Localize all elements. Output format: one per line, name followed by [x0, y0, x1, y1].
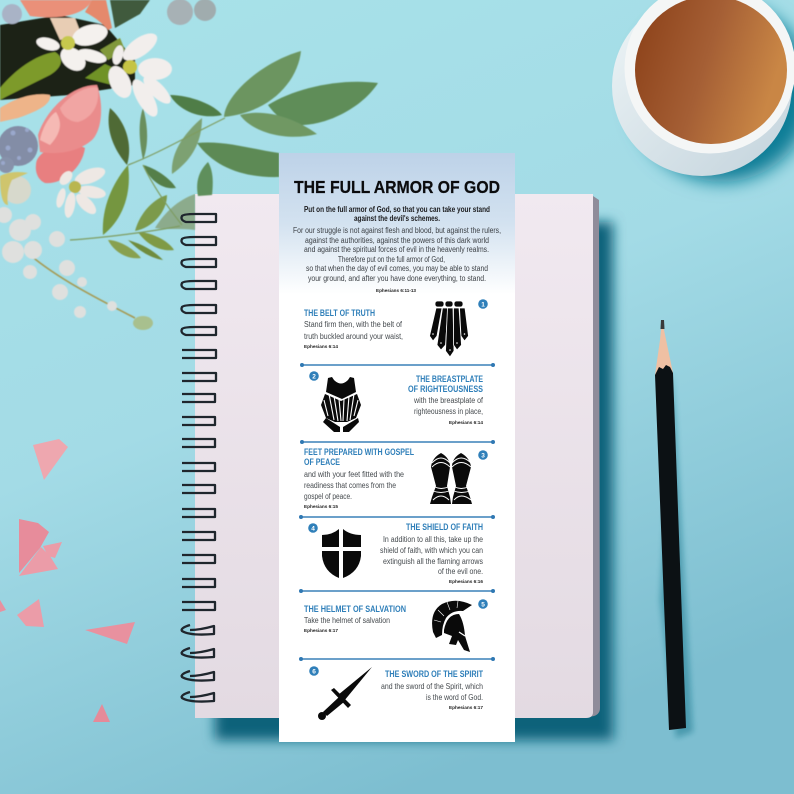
daisy 3 [55, 164, 107, 219]
tea cup [612, 0, 794, 182]
heading: belt: THE BELT OF TRUTH [304, 308, 375, 318]
intro verse body: against the authorities, against the powers of this dark world [305, 236, 489, 245]
text: shield [380, 535, 484, 576]
pink flower lower [36, 145, 85, 183]
badge 3: 3 [481, 452, 485, 459]
stems [30, 118, 225, 318]
icon: sword [318, 667, 372, 720]
bud [3, 176, 31, 204]
text: shield: In addition to all this, take up the [383, 535, 484, 544]
heading: sword: THE SWORD OF THE SPIRIT [385, 669, 483, 679]
section 6: sword [309, 666, 483, 720]
text: feet: readiness that comes from the [304, 481, 397, 490]
blue sprigs [0, 0, 216, 173]
reference: sword: Ephesians 6:17 [449, 705, 483, 711]
bookmark card [279, 153, 515, 742]
text: sword: and the sword of the Spirit, which [381, 682, 483, 691]
intro verse bold [304, 205, 490, 223]
salmon flower top [20, 0, 92, 17]
heading: feet: OF PEACE [304, 457, 340, 467]
text: belt: truth buckled around your waist, [304, 332, 403, 341]
section 5: helmet [304, 599, 488, 652]
reference: belt: Ephesians 6:14 [304, 344, 338, 350]
badge 2: 2 [312, 373, 316, 380]
badge 5: 5 [481, 601, 485, 608]
badge 1: 1 [481, 301, 485, 308]
icon: breastplate [321, 377, 361, 432]
reference: breastplate: Ephesians 6:14 [449, 420, 483, 426]
section 3: feet [304, 447, 488, 510]
leaves upper right [103, 51, 378, 260]
text: feet: and with your feet fitted with the [304, 470, 405, 479]
intro verse body [293, 226, 501, 283]
text: breastplate: with the breastplate of [413, 396, 484, 405]
notebook [195, 194, 613, 740]
heading: breastplate: THE BREASTPLATE [416, 374, 483, 384]
pink paper scraps [0, 439, 135, 722]
reference: helmet: Ephesians 6:17 [304, 628, 338, 634]
badge 6: 6 [312, 668, 316, 675]
text: sword: is the word of God. [426, 693, 483, 702]
intro verse bold: against the devil's schemes. [354, 214, 440, 223]
white daisy 1 [35, 21, 110, 76]
icon: greaves [430, 453, 472, 504]
text: belt [304, 320, 403, 341]
intro verse body: your ground, and after you have done everything, to stand. [308, 274, 486, 283]
title: THE FULL ARMOR OF GOD [294, 177, 500, 197]
badge 5 [478, 599, 488, 609]
text: helmet: Take the helmet of salvation [304, 616, 390, 625]
text: sword [381, 682, 483, 702]
intro verse body: For our struggle is not against flesh and blood, but against the rulers, [293, 226, 501, 235]
badge 3 [478, 450, 488, 460]
text: feet [304, 470, 405, 501]
heading: helmet: THE HELMET OF SALVATION [304, 604, 406, 614]
intro reference: Ephesians 6:11-13 [376, 288, 416, 294]
icon: shield [322, 529, 361, 578]
spiral binding [182, 214, 216, 702]
foliage backdrop [0, 15, 135, 100]
badge 4: 4 [311, 525, 315, 532]
text: belt: Stand firm then, with the belt of [304, 320, 403, 329]
section 1: belt of truth [304, 299, 488, 357]
icon: helmet [432, 601, 472, 652]
section 4: shield [308, 522, 484, 585]
pencil [655, 320, 693, 738]
reference: feet: Ephesians 6:15 [304, 504, 338, 510]
text: feet: gospel of peace. [304, 492, 352, 501]
heading: breastplate [408, 374, 483, 394]
badge 6 [309, 666, 319, 676]
heading: breastplate: OF RIGHTEOUSNESS [408, 384, 483, 394]
text: breastplate [413, 396, 484, 416]
text: shield: of the evil one. [438, 567, 483, 576]
flowers and leaves [0, 0, 378, 330]
card background [279, 153, 515, 742]
reference: shield: Ephesians 6:16 [449, 579, 483, 585]
badge 1 [478, 299, 488, 309]
white daisy 2 [104, 28, 175, 120]
intro verse bold: Put on the full armor of God, so that you can take your stand [304, 205, 490, 214]
icon: belt [430, 301, 468, 357]
small white flowers [0, 207, 117, 318]
badge 2 [309, 371, 319, 381]
badge 4 [308, 523, 318, 533]
dividers [299, 363, 495, 661]
text: shield: extinguish all the flaming arrows [383, 557, 483, 566]
heading: feet: FEET PREPARED WITH GOSPEL [304, 447, 414, 457]
intro verse body: so that when the day of evil comes, you may be able to stand [306, 264, 488, 273]
heading: shield: THE SHIELD OF FAITH [406, 522, 483, 532]
intro verse body: Therefore put on the full armor of God, [338, 255, 445, 264]
text: breastplate: righteousness in place, [414, 407, 483, 416]
peach bud [0, 94, 50, 122]
section 2: breastplate [309, 371, 484, 432]
pink flower [38, 85, 101, 153]
heading: feet [304, 447, 414, 467]
text: shield: shield of faith, with which you can [380, 546, 483, 555]
intro verse body: and against the spiritual forces of evil in the heavenly realms. [304, 245, 489, 254]
